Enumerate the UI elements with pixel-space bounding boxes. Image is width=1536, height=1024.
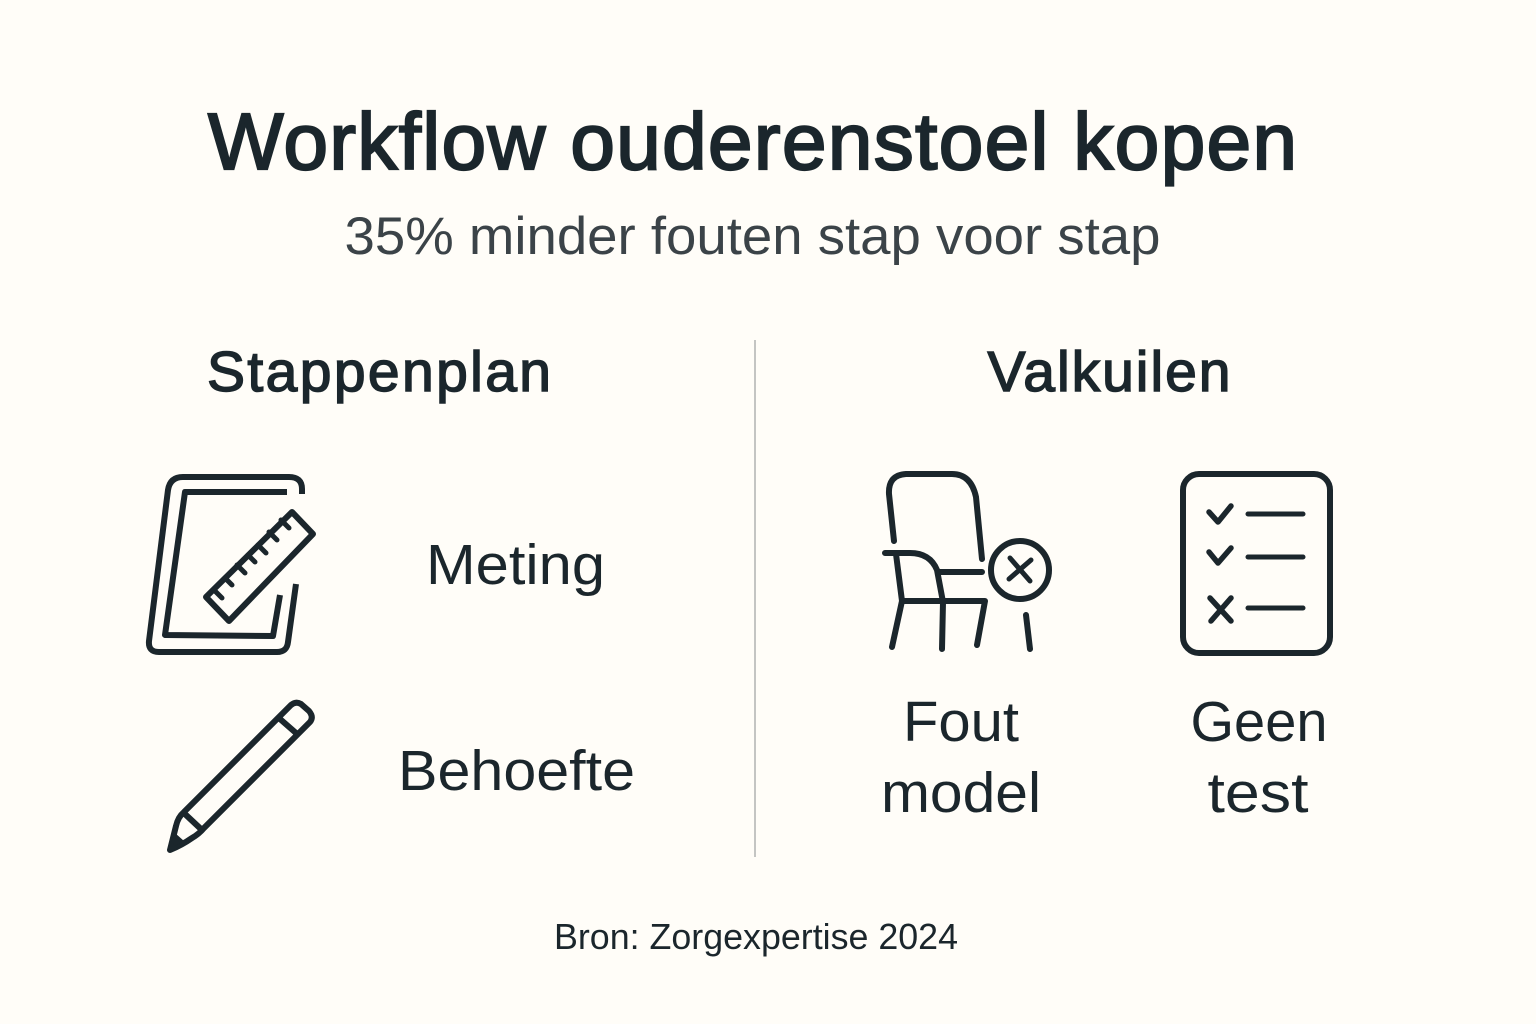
heading: Valkuilen: Valkuilen [988,340,1230,404]
divider [754,340,756,857]
label: Geen test [1190,690,1328,825]
heading: Stappenplan: Stappenplan [207,340,551,404]
label: Geen test: test [1208,761,1309,825]
title: Workflow ouderenstoel kopen [208,97,1297,186]
label: Fout model: model [881,761,1041,825]
icon: chair with cross [885,474,1049,649]
label: Meting: Meting [426,533,605,597]
label: Fout model: Fout [903,690,1019,754]
icon: pencil [170,703,312,850]
source line: Bron: Zorgexpertise 2024 [554,916,958,957]
label: Behoefte: Behoefte [398,739,635,803]
icon: notepad with ruler [149,477,313,652]
label: Geen test: Geen [1190,690,1328,754]
panel: Valkuilen [881,340,1330,825]
subtitle: 35% minder fouten stap voor stap [344,207,1160,266]
label: Fout model [881,690,1041,825]
panel: Stappenplan [149,340,635,850]
icon: checklist [1183,474,1330,653]
